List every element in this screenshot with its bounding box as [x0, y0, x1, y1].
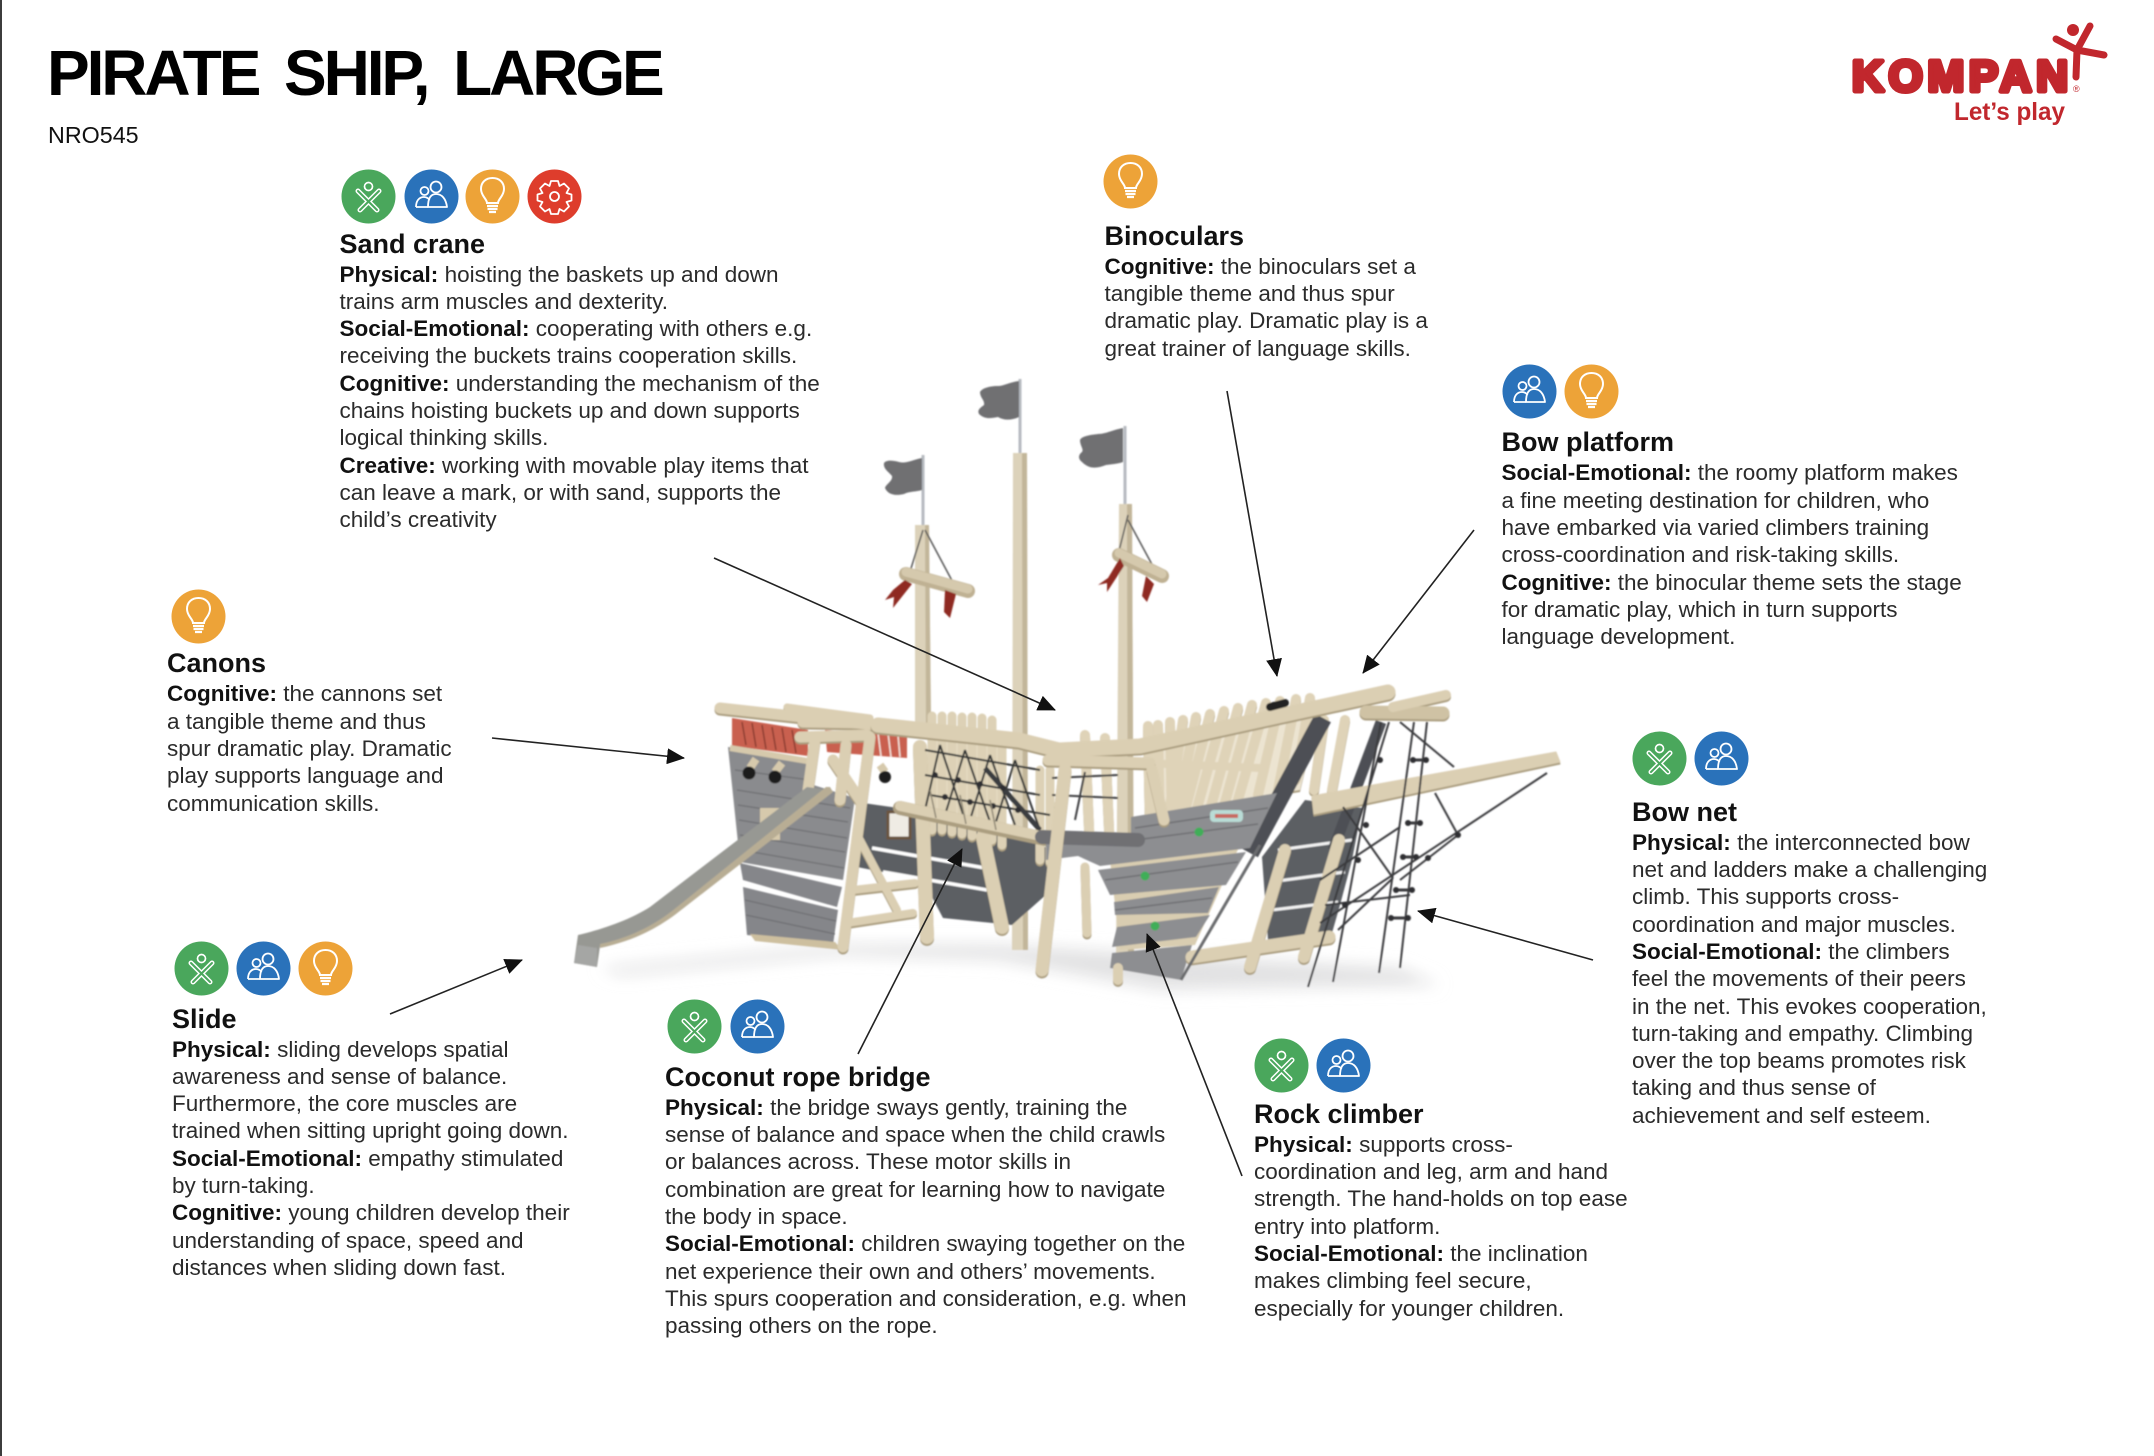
bow nets and ladders: [1308, 722, 1547, 987]
dark rear bow hull: [1250, 718, 1381, 940]
text: [340, 262, 820, 532]
text: Cognitive: the binocular theme sets the stage: [1502, 570, 1962, 595]
bow slats: [1085, 698, 1345, 850]
arrow: canons: [492, 738, 684, 758]
text: tangible theme and thus spur: [1104, 281, 1395, 306]
text: especially for younger children.: [1254, 1296, 1564, 1321]
arrow: bow net: [1418, 911, 1593, 960]
icon: cognitive: [1104, 154, 1158, 208]
heading: Slide: [172, 1004, 237, 1034]
text: logical thinking skills.: [340, 425, 548, 450]
heading: Bow platform: [1502, 427, 1674, 457]
text: distances when sliding down fast.: [172, 1255, 506, 1280]
text: sense of balance and space when the child crawls: [665, 1122, 1165, 1147]
text: receiving the buckets trains cooperation skills.: [340, 343, 797, 368]
panel: canons: [167, 590, 452, 816]
text: Creative: working with movable play items that: [340, 453, 808, 478]
text: Social-Emotional: the climbers: [1632, 939, 1950, 964]
text: passing others on the rope.: [665, 1313, 938, 1338]
text: have embarked via varied climbers training: [1502, 515, 1929, 540]
text: strength. The hand-holds on top ease: [1254, 1186, 1628, 1211]
text: chains hoisting buckets up and down supports: [340, 398, 800, 423]
text: taking and thus sense of: [1632, 1075, 1876, 1100]
bow timbers and rails: [878, 692, 1560, 980]
panel: bow net: [1632, 732, 1987, 1128]
text: can leave a mark, or with sand, supports the: [340, 480, 781, 505]
text: cross-coordination and risk-taking skills.: [1502, 542, 1899, 567]
dark inner hull: [857, 803, 1052, 925]
text: [172, 1036, 570, 1280]
text: dramatic play. Dramatic play is a: [1104, 308, 1428, 333]
text: Physical: the bridge sways gently, training the: [665, 1095, 1127, 1120]
text: by turn-taking.: [172, 1173, 315, 1198]
stern hull: [728, 718, 907, 950]
text: coordination and leg, arm and hand: [1254, 1159, 1608, 1184]
text: Physical: hoisting the baskets up and down: [340, 262, 779, 286]
text: [1254, 1132, 1628, 1321]
arrow: sand crane: [714, 558, 1055, 710]
text: spur dramatic play. Dramatic: [167, 736, 452, 761]
text: trained when sitting upright going down.: [172, 1118, 569, 1143]
text: Social-Emotional: the roomy platform makes: [1502, 460, 1958, 485]
text: or balances across. These motor skills in: [665, 1149, 1071, 1174]
heading: Binoculars: [1104, 221, 1244, 251]
text: understanding of space, speed and: [172, 1228, 524, 1253]
text: communication skills.: [167, 791, 380, 816]
text: language development.: [1502, 624, 1735, 649]
text: the body in space.: [665, 1204, 848, 1229]
heading: Canons: [167, 648, 266, 678]
rope bridge: [900, 745, 1050, 840]
bow hull planks: [1042, 793, 1277, 980]
icon: cognitive: [172, 590, 226, 644]
text: entry into platform.: [1254, 1214, 1440, 1239]
logo: KOMPAN Let's play: KOMPAN: [1852, 52, 2068, 101]
text: for dramatic play, which in turn supports: [1502, 597, 1898, 622]
text: Social-Emotional: empathy stimulated: [172, 1146, 563, 1171]
text: Cognitive: young children develop their: [172, 1200, 570, 1225]
text: over the top beams promotes risk: [1632, 1048, 1966, 1073]
text: net and ladders make a challenging: [1632, 857, 1987, 882]
logo: KOMPAN Let's play: Let’s play: [1954, 98, 2065, 126]
arrow: bow platform: [1363, 530, 1474, 673]
text: play supports language and: [167, 763, 443, 788]
panel: binoculars: [1104, 154, 1428, 361]
text: Physical: supports cross-: [1254, 1132, 1513, 1157]
bow net centre: [1052, 770, 1118, 820]
logo: KOMPAN Let's play: [1852, 22, 2108, 126]
ground shadow: [600, 945, 1440, 990]
picket railing behind bridge: [928, 716, 1050, 862]
text: Cognitive: the binoculars set a: [1104, 254, 1416, 279]
text: Social-Emotional: children swaying together on the: [665, 1231, 1185, 1256]
text: awareness and sense of balance.: [172, 1064, 507, 1089]
text: a tangible theme and thus: [167, 709, 426, 734]
logo: KOMPAN Let's play: ®: [2073, 84, 2080, 94]
flags and masts: [884, 379, 1162, 960]
slide: [574, 787, 833, 967]
text: Cognitive: the cannons set: [167, 681, 442, 706]
product code: NRO545: [48, 122, 139, 148]
panel: slide: [172, 942, 570, 1280]
text: climb. This supports cross-: [1632, 884, 1899, 909]
text: [1632, 830, 1987, 1128]
arrow: slide: [390, 960, 522, 1014]
panel: sand crane: [340, 170, 820, 532]
text: child’s creativity: [340, 507, 497, 532]
text: Social-Emotional: the inclination: [1254, 1241, 1588, 1266]
heading: Bow net: [1632, 796, 1737, 826]
icons: physical, social: [1632, 732, 1748, 786]
heading: Rock climber: [1254, 1099, 1424, 1129]
text: [1502, 460, 1962, 649]
text: Social-Emotional: cooperating with others e.g.: [340, 316, 812, 341]
panel: coconut rope bridge: [665, 1000, 1187, 1338]
panel: bow platform: [1502, 364, 1962, 649]
text: turn-taking and empathy. Climbing: [1632, 1021, 1973, 1046]
text: makes climbing feel secure,: [1254, 1268, 1532, 1293]
text: [1104, 254, 1428, 361]
icons: physical, social: [1254, 1038, 1370, 1092]
text: feel the movements of their peers: [1632, 966, 1966, 991]
heading: Coconut rope bridge: [665, 1062, 930, 1092]
arrow: coconut rope bridge: [858, 849, 962, 1054]
text: [167, 681, 452, 816]
text: combination are great for learning how to navigate: [665, 1177, 1165, 1202]
text: [665, 1095, 1187, 1338]
text: net experience their own and others’ movements.: [665, 1259, 1156, 1284]
text: achievement and self esteem.: [1632, 1103, 1931, 1128]
page left border: [0, 0, 2, 1456]
icons: physical, social, cognitive: [174, 942, 352, 996]
text: in the net. This evokes cooperation,: [1632, 994, 1987, 1019]
panel: rock climber: [1254, 1038, 1628, 1321]
icons: social, cognitive: [1502, 364, 1618, 418]
text: trains arm muscles and dexterity.: [340, 289, 668, 314]
text: This spurs cooperation and consideration, e.g. when: [665, 1286, 1187, 1311]
text: coordination and major muscles.: [1632, 912, 1956, 937]
arrow: binoculars: [1227, 391, 1277, 676]
text: Cognitive: understanding the mechanism of the: [340, 371, 820, 396]
icons: physical, social: [668, 1000, 784, 1054]
heading: Sand crane: [340, 229, 485, 259]
text: Physical: the interconnected bow: [1632, 830, 1970, 855]
title: PIRATE SHIP, LARGE: [47, 37, 662, 109]
text: a fine meeting destination for children, who: [1502, 488, 1929, 513]
text: Furthermore, the core muscles are: [172, 1091, 517, 1116]
stern frame timbers: [720, 707, 1002, 947]
icons: physical, social, cognitive, creative: [342, 170, 582, 224]
text: Physical: sliding develops spatial: [172, 1036, 508, 1062]
arrow: rock climber: [1147, 934, 1242, 1176]
text: great trainer of language skills.: [1104, 336, 1411, 361]
